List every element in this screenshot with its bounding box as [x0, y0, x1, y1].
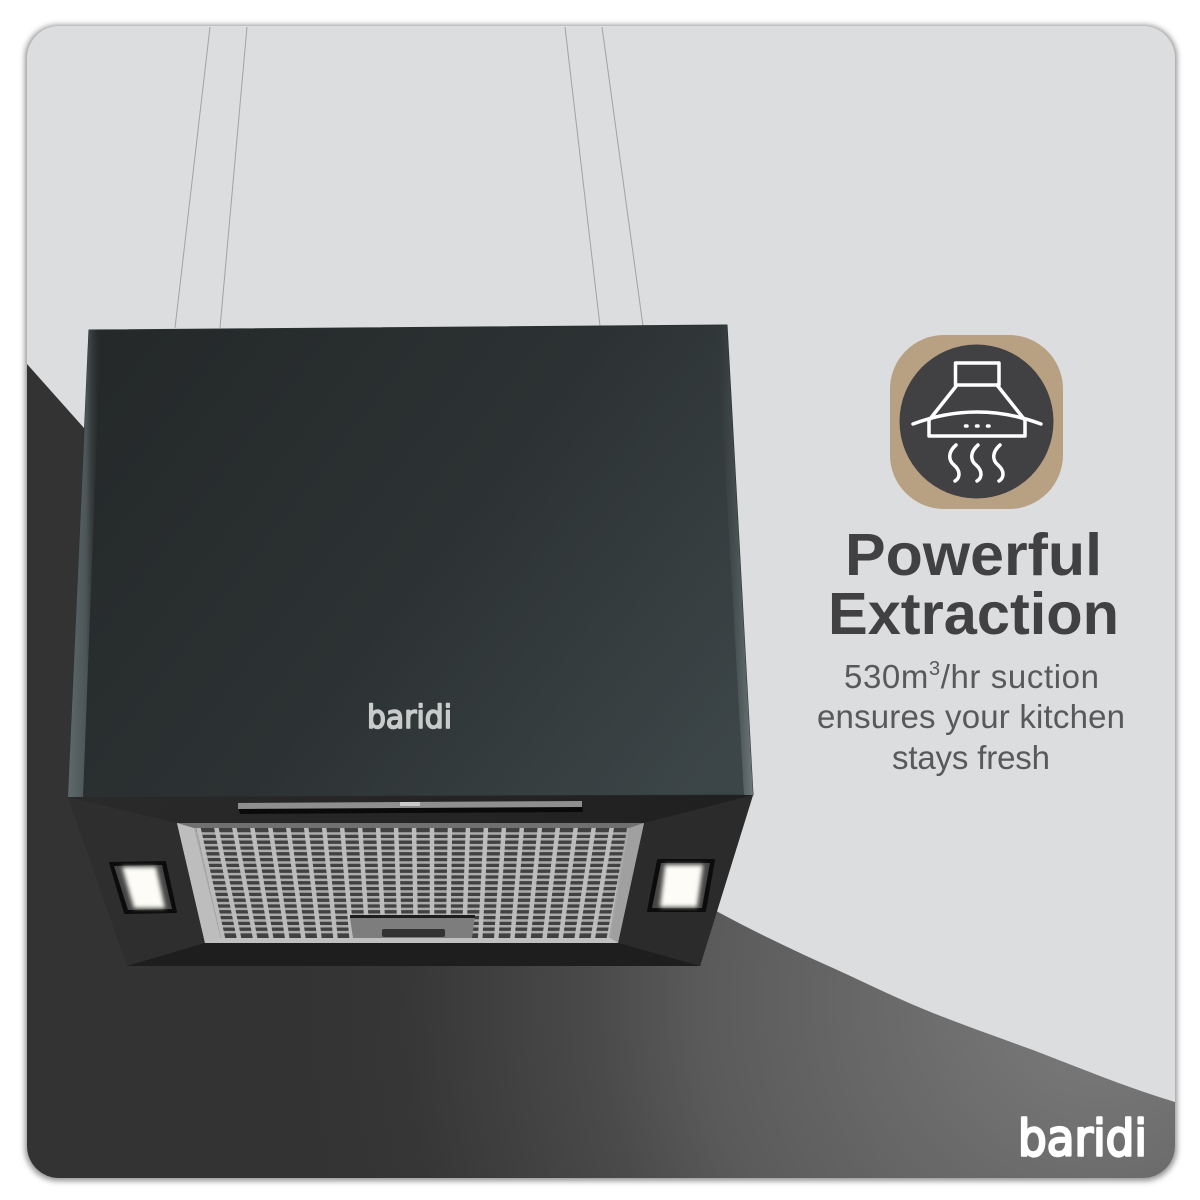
right light [648, 860, 714, 911]
hood body logo: baridi [367, 698, 452, 736]
left light [110, 862, 176, 913]
steel frame [177, 823, 644, 943]
product: island cooker hood [68, 325, 753, 966]
heading: Powerful Extraction [828, 522, 1119, 647]
filter handle [350, 915, 475, 938]
dark curved floor shape [27, 364, 1175, 1178]
brand logo: baridi [1018, 1110, 1147, 1168]
description text: /hr suction [941, 658, 1099, 695]
grease filter mesh [189, 825, 635, 943]
description text [817, 658, 1125, 776]
description text: stays fresh [892, 739, 1050, 776]
description text: 530m [844, 658, 928, 695]
heading: Powerful Extraction: Extraction [828, 581, 1119, 647]
control strip [238, 801, 583, 814]
heading: Powerful Extraction: Powerful [845, 522, 1102, 588]
description text: 3 [929, 658, 940, 680]
icon: cooker hood badge [890, 335, 1063, 509]
description text: ensures your kitchen [817, 698, 1125, 735]
suspension wires [175, 27, 643, 328]
hood underside [68, 795, 753, 966]
hood body [68, 325, 753, 797]
